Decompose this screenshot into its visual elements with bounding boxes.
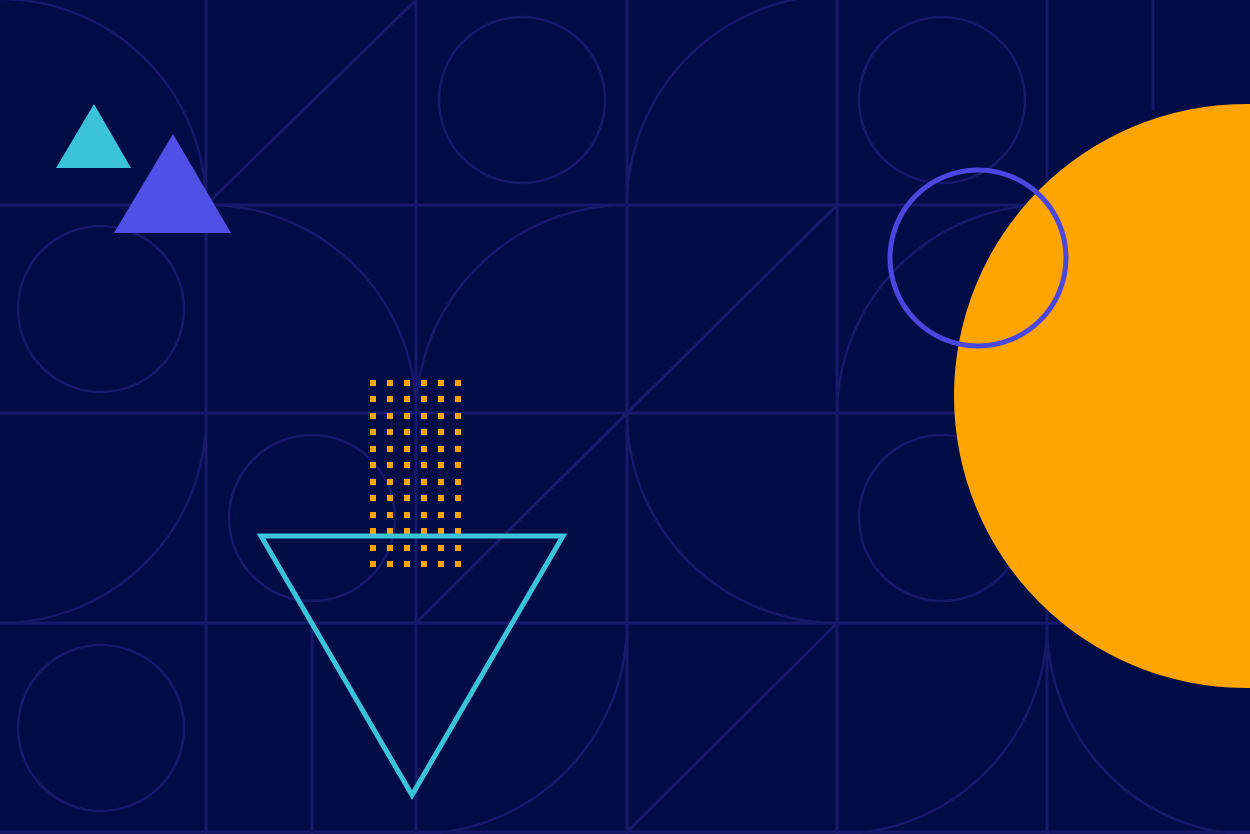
icon: purple ring	[890, 170, 1066, 346]
icon: cyan triangle	[56, 104, 131, 168]
icon: orange circle	[954, 104, 1250, 688]
dot grid	[370, 380, 461, 567]
icon: purple triangle	[114, 134, 231, 233]
icon: outlined down triangle	[261, 536, 563, 795]
